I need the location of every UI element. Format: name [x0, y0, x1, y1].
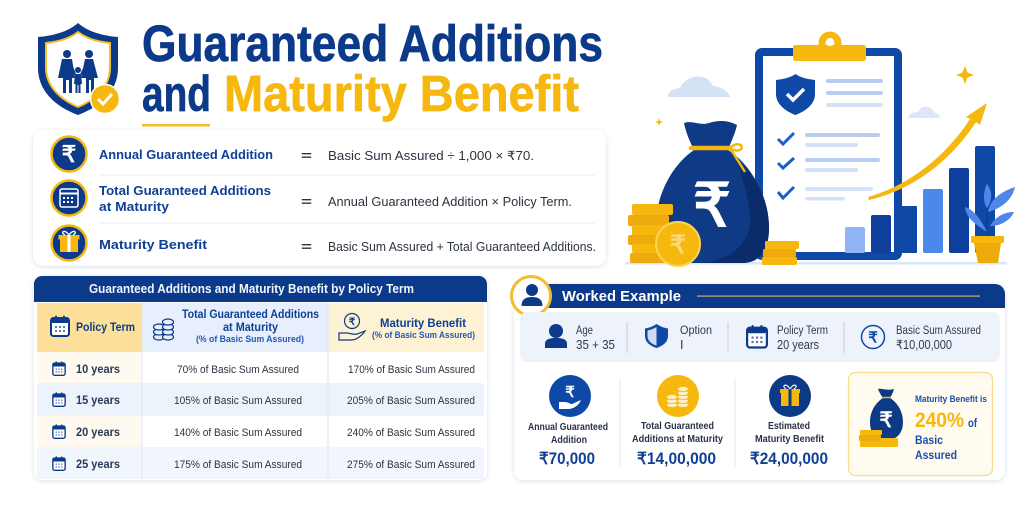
column header: total guaranteed additions: (% of Basic Sum Assured): [196, 334, 304, 345]
callout: 240 percent: 240%: [915, 408, 964, 432]
input: option: [645, 324, 712, 352]
input: basic sum assured: ₹: [868, 330, 878, 346]
column header: maturity benefit: [328, 303, 484, 352]
row: 20 years: [53, 424, 475, 439]
result: total guaranteed additions: [632, 375, 723, 468]
input: age: [545, 324, 615, 352]
input: basic sum assured: [862, 325, 981, 352]
formula: maturity benefit: =: [301, 239, 313, 254]
formula: total guaranteed additions: Total Guaranteed Additions: [99, 183, 271, 198]
bar chart: [845, 146, 995, 253]
title: and: [142, 66, 211, 122]
title: [142, 15, 603, 122]
result: total guaranteed additions: Additions at Maturity: [632, 434, 723, 445]
result: annual guaranteed addition: ₹: [565, 384, 575, 401]
callout: 240 percent: of: [968, 418, 977, 430]
formula: annual guaranteed addition: Basic Sum Assured ÷ 1,000 × ₹70.: [328, 149, 534, 163]
callout: 240 percent: Basic: [915, 433, 943, 447]
row: 25 years: 275% of Basic Sum Assured: [347, 459, 475, 471]
result: annual guaranteed addition: [528, 375, 608, 468]
result: annual guaranteed addition: ₹70,000: [539, 450, 595, 468]
title: Maturity Benefit: [224, 65, 579, 122]
growth arrow: [868, 103, 987, 200]
column header: total guaranteed additions: [142, 303, 328, 352]
row: 10 years: 170% of Basic Sum Assured: [348, 364, 475, 376]
title: Guaranteed Additions: [142, 15, 603, 72]
row: 20 years: 20 years: [76, 425, 120, 439]
formula: maturity benefit: [52, 226, 596, 260]
table header: Guaranteed Additions and Maturity Benefit by Policy Term: [89, 282, 414, 296]
coin stacks: [628, 204, 799, 266]
formula: total guaranteed additions: at Maturity: [99, 199, 170, 214]
icon: small money bag: ₹: [879, 409, 893, 432]
formula: annual guaranteed addition: Annual Guaranteed Addition: [99, 147, 273, 162]
table rows background: [37, 303, 484, 479]
illustration: money bag, clipboard and growth chart: [625, 35, 1015, 266]
row: 10 years: 10 years: [76, 362, 120, 376]
result: total guaranteed additions: Total Guaranteed: [641, 421, 714, 432]
formula: annual guaranteed addition: =: [301, 148, 313, 163]
icon: small money bag: [859, 389, 903, 447]
input: policy term: [747, 325, 828, 352]
input: age: Age: [576, 325, 593, 337]
formula: total guaranteed additions: [52, 180, 572, 216]
clipboard: [759, 35, 898, 256]
cloud right: [908, 107, 940, 118]
column header: policy term: Policy Term: [76, 322, 135, 334]
coin stacks: ₹: [670, 231, 686, 259]
worked example header: Worked Example: [562, 288, 681, 305]
input: basic sum assured: ₹10,00,000: [896, 338, 952, 352]
result: estimated maturity benefit: Estimated: [768, 421, 810, 432]
formula: maturity benefit: Maturity Benefit: [99, 237, 208, 252]
result: annual guaranteed addition: Addition: [551, 435, 587, 446]
column header: total guaranteed additions: Total Guaranteed Additions: [182, 309, 319, 321]
result: estimated maturity benefit: ₹24,00,000: [750, 450, 828, 468]
input: option: Option: [680, 325, 712, 337]
cloud left: [668, 76, 730, 97]
result: estimated maturity benefit: Maturity Benefit: [755, 434, 825, 445]
input: basic sum assured: Basic Sum Assured: [896, 325, 981, 337]
row: 10 years: [53, 361, 475, 376]
formula: annual guaranteed addition: [52, 136, 534, 172]
formula: maturity benefit: Basic Sum Assured + Total Guaranteed Additions.: [328, 240, 596, 254]
sparkles: [956, 66, 974, 84]
result: total guaranteed additions: ₹14,00,000: [637, 450, 716, 468]
column header: maturity benefit: (% of Basic Sum Assured): [372, 330, 475, 341]
row: 25 years: 25 years: [76, 457, 120, 471]
panel: formulas: [33, 130, 606, 266]
input: age: 35 + 35: [576, 338, 615, 352]
result: estimated maturity benefit: [750, 375, 828, 468]
formula: annual guaranteed addition: ₹: [62, 141, 77, 167]
callout: 240 percent: Maturity Benefit is: [915, 394, 987, 405]
row: 10 years: 70% of Basic Sum Assured: [177, 364, 299, 376]
row: 20 years: 240% of Basic Sum Assured: [347, 427, 475, 439]
row: 15 years: 105% of Basic Sum Assured: [174, 395, 302, 407]
column header: maturity benefit: Maturity Benefit: [380, 318, 466, 330]
money bag: ₹: [693, 172, 731, 239]
callout: 240 percent: Assured: [915, 448, 957, 462]
worked example header: [512, 276, 1005, 316]
row: 15 years: [53, 392, 475, 407]
money bag: [656, 121, 769, 263]
panel: policy term table: [34, 276, 487, 480]
row: 20 years: 140% of Basic Sum Assured: [174, 427, 302, 439]
input: policy term: Policy Term: [777, 325, 828, 337]
input: policy term: 20 years: [777, 338, 819, 352]
panel: worked example: [512, 276, 1005, 480]
column header: policy term: [37, 303, 142, 352]
inputs strip: [520, 312, 1000, 362]
row: 15 years: 205% of Basic Sum Assured: [347, 395, 475, 407]
result: annual guaranteed addition: Annual Guaranteed: [528, 422, 608, 433]
logo: family shield: [38, 23, 120, 115]
row: 25 years: 175% of Basic Sum Assured: [174, 459, 302, 471]
ground: [625, 262, 1007, 264]
formula: total guaranteed additions: Annual Guaranteed Addition × Policy Term.: [328, 195, 572, 209]
table header: [34, 276, 487, 302]
input: option: I: [680, 338, 683, 352]
row: 15 years: 15 years: [76, 393, 120, 407]
column header: maturity benefit: ₹: [349, 317, 356, 328]
callout: 240 percent: [848, 372, 992, 476]
formula: total guaranteed additions: =: [301, 194, 313, 209]
plant: [965, 184, 1015, 263]
column header: total guaranteed additions: at Maturity: [223, 322, 279, 334]
row: 25 years: [53, 456, 475, 471]
